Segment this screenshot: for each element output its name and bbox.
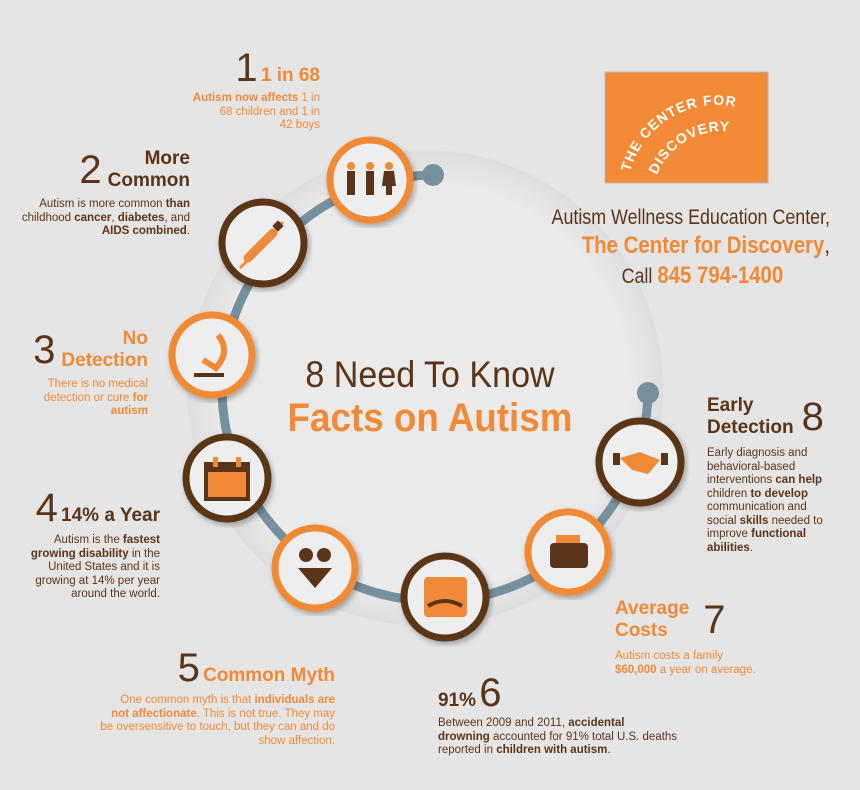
logo: THE CENTER FOR: [620, 95, 736, 170]
fact 2: More: [145, 148, 190, 169]
fact 3: 3: [33, 328, 55, 372]
fact 7: [615, 598, 756, 676]
fact 8: Early diagnosis and behavioral-based interventions can help children to develop communication and social skills needed to improve functional abilities.: [707, 447, 823, 554]
fact 5: One common myth is that individuals are not affectionate. This is not true. They may be oversensitive to touch, but they can and do show affection.: [100, 694, 335, 746]
icon 3: microscope: [172, 315, 252, 395]
icon 4: calendar: [186, 437, 268, 519]
icon 1: people: [330, 140, 410, 220]
logo: DISCOVERY: [648, 121, 730, 174]
fact 4: [31, 486, 160, 600]
fact 7: Autism costs a family: [615, 650, 723, 662]
fact 7: Costs: [615, 620, 668, 641]
fact 5: [100, 646, 335, 746]
title: Facts on Autism: [288, 396, 572, 440]
fact 3: There is no medical detection or cure for autism: [44, 378, 148, 417]
fact 3: No: [123, 328, 148, 349]
fact 6: 91% 6: [438, 671, 501, 715]
fact 8: [707, 395, 824, 554]
fact 2: [22, 148, 190, 237]
fact 5: 5 Common Myth: [178, 646, 335, 690]
contact text: The Center for Discovery,: [582, 232, 830, 259]
contact text: [552, 206, 830, 289]
fact 7: Average: [615, 598, 689, 619]
fact 1: 1 1 in 68: [235, 46, 320, 90]
icon 2: syringe: [222, 202, 304, 284]
fact 2: Common: [108, 170, 190, 191]
fact 1: 68 children and 1 in: [220, 106, 320, 118]
logo: [604, 72, 768, 184]
icon 5: heart: [275, 528, 355, 608]
fact 1: Autism now affects 1 in: [193, 92, 320, 104]
fact 4: 4 14% a Year: [36, 486, 160, 530]
contact text: Autism Wellness Education Center,: [552, 206, 830, 229]
title: 8 Need To Know: [305, 354, 555, 395]
fact 6: Between 2009 and 2011, accidental drowning accounted for 91% total U.S. deaths reported in children with autism.: [438, 717, 677, 756]
fact 1: [193, 46, 320, 131]
icon 7: wallet: [528, 512, 608, 592]
fact 8: 8: [802, 395, 824, 439]
fact 8: Early: [707, 395, 753, 416]
fact 7: 7: [703, 598, 726, 642]
title: [288, 354, 572, 440]
icon 8: handshake: [599, 421, 681, 503]
fact 1: 42 boys: [280, 119, 320, 131]
fact 4: Autism is the fastest growing disability in the United States and it is growing at 14% per year around the world.: [31, 534, 160, 600]
fact 3: Detection: [61, 350, 148, 371]
fact 2: Autism is more common than childhood cancer, diabetes, and AIDS combined.: [22, 198, 190, 237]
fact 3: [33, 328, 148, 417]
contact text: Call 845 794-1400: [622, 262, 783, 289]
fact 2: 2: [79, 148, 102, 192]
fact 8: Detection: [707, 417, 794, 438]
icon 6: swimmer: [404, 556, 486, 638]
fact 7: $60,000 a year on average.: [615, 664, 756, 676]
fact 6: [438, 671, 677, 756]
